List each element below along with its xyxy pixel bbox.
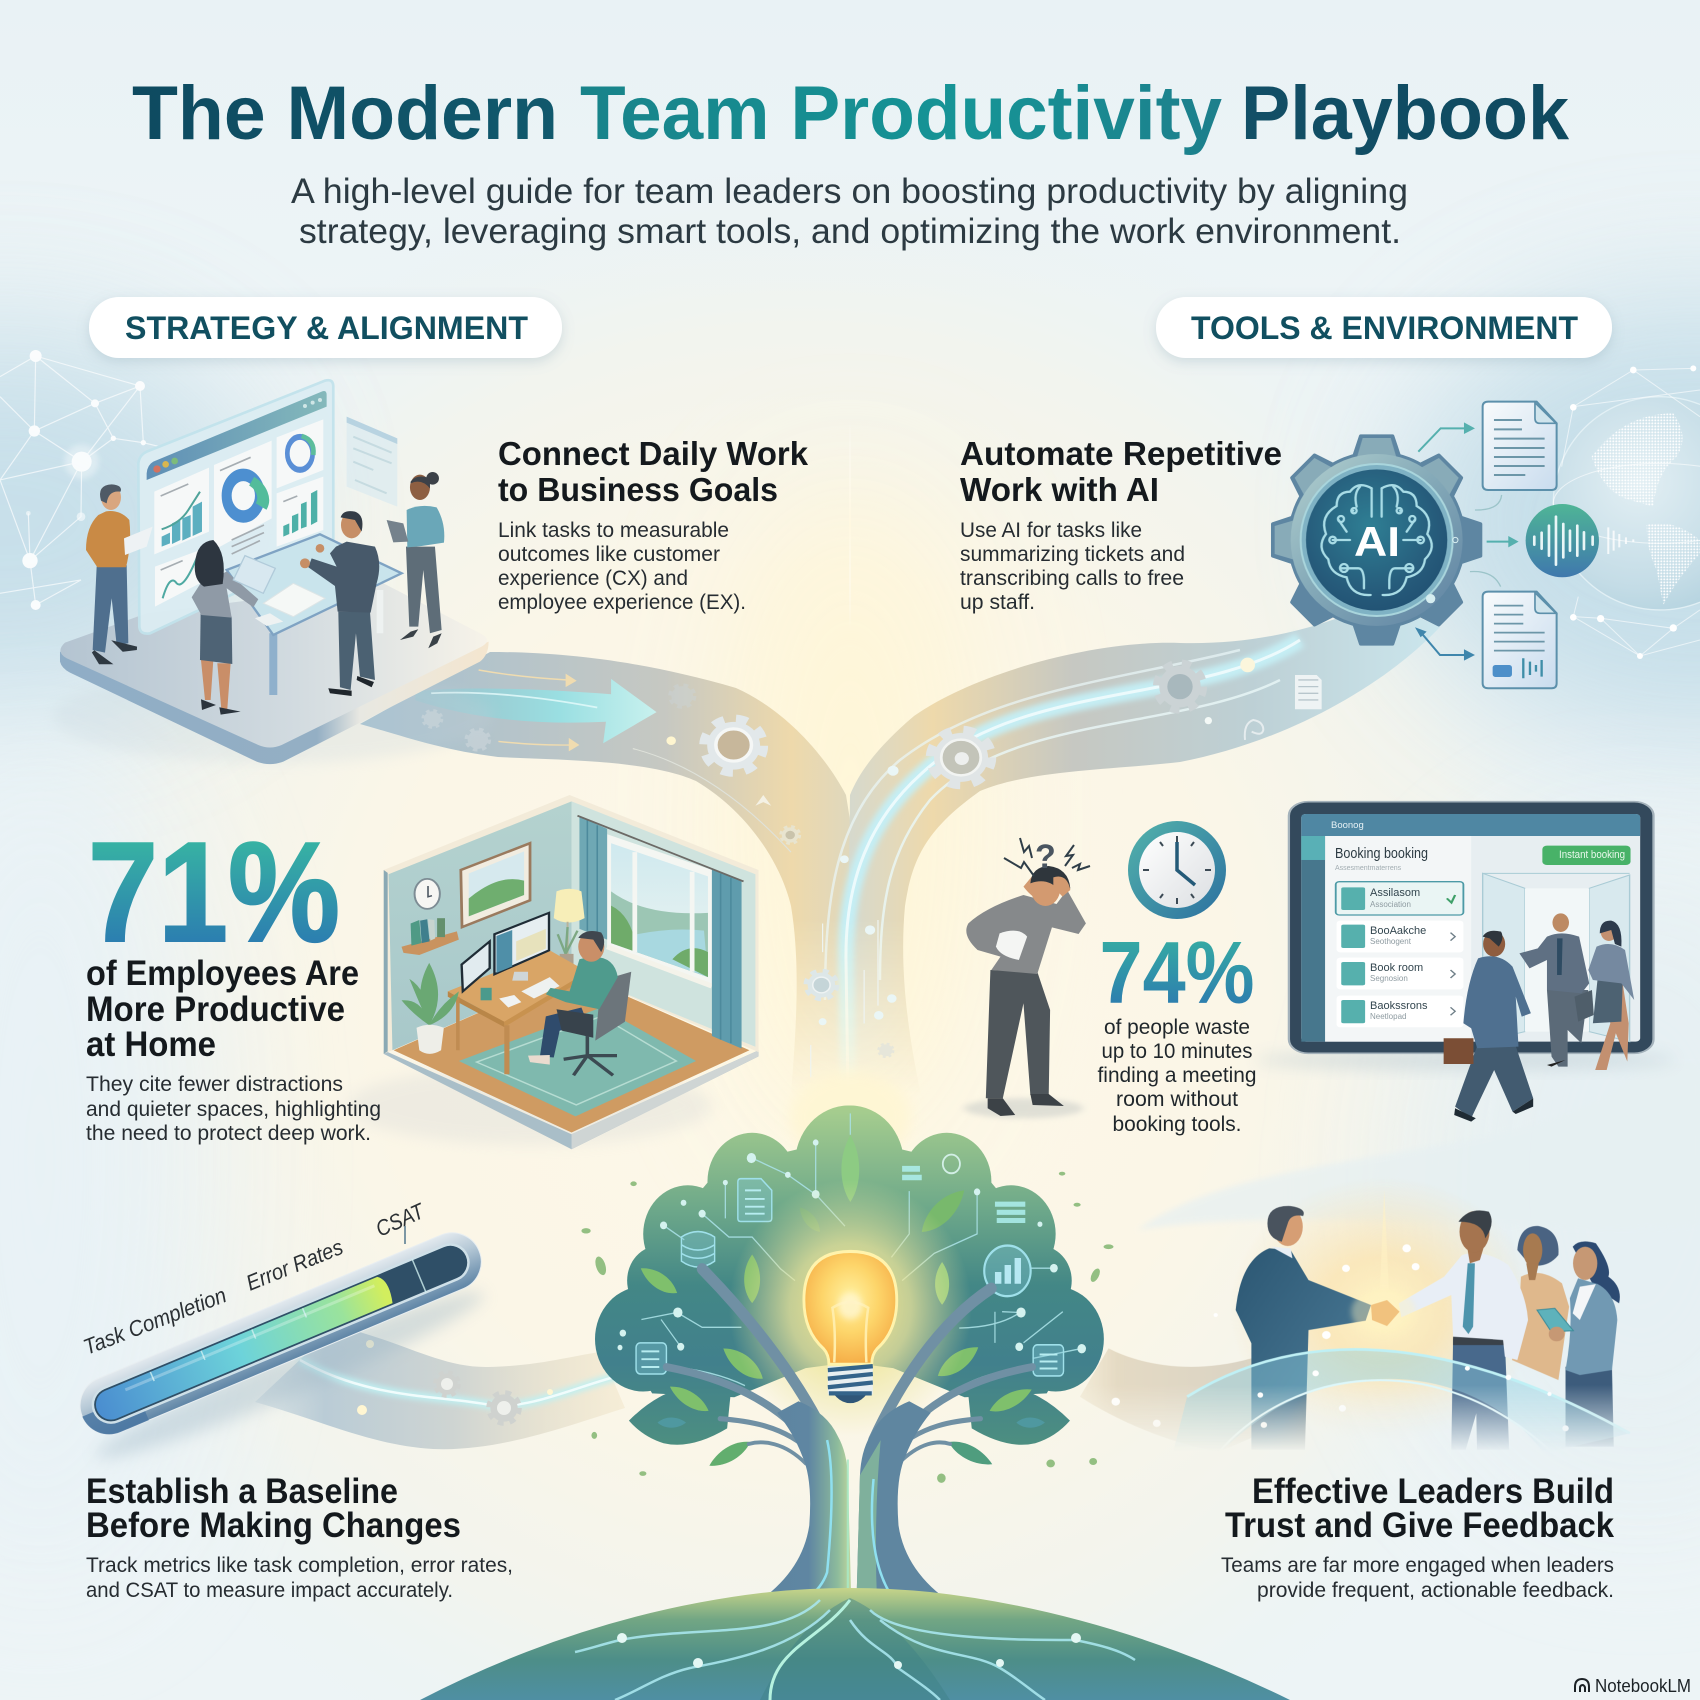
leaves in crown bbox=[637, 1135, 1045, 1472]
manager in white shirt bbox=[1399, 1210, 1528, 1450]
gears on left road bbox=[423, 685, 694, 750]
stat: 71 percent: They cite fewer distractions bbox=[86, 1072, 343, 1096]
man in dark suit bbox=[1236, 1206, 1371, 1450]
lightbulb bbox=[804, 1251, 897, 1403]
illustration: team at dashboard on platform bbox=[53, 380, 493, 764]
man walking with briefcase bbox=[1444, 931, 1533, 1122]
tablet booking app with people bbox=[1255, 802, 1675, 1122]
tablet text: Association bbox=[1370, 900, 1411, 909]
illustration: AI gear with outputs bbox=[1273, 402, 1633, 688]
tablet text: Segnosion bbox=[1370, 974, 1408, 983]
bulb glow bbox=[729, 1179, 972, 1436]
woman with teal tablet bbox=[1537, 1241, 1620, 1447]
stat: 71 percent: More Productive bbox=[86, 990, 345, 1029]
stress marks: ? bbox=[1035, 838, 1056, 876]
person: man in orange sweater bbox=[86, 484, 153, 663]
network mesh, left bbox=[0, 350, 160, 610]
potted plant bbox=[402, 963, 459, 1054]
falling leaves bbox=[581, 1172, 1114, 1483]
dashboard screen bbox=[138, 380, 333, 634]
arrows from gear bbox=[1415, 422, 1519, 661]
tablet text: Instant booking bbox=[1559, 849, 1625, 861]
text block: automate repetitive work: summarizing tickets and bbox=[960, 543, 1185, 566]
stat: 71 percent: at Home bbox=[86, 1025, 216, 1064]
text block: establish a baseline: Track metrics like task completion, error rates, bbox=[86, 1554, 513, 1577]
platform bbox=[60, 583, 489, 764]
tablet text: Seothogent bbox=[1370, 937, 1412, 946]
title: Team Productivity bbox=[580, 71, 1222, 156]
central tree with lightbulb bbox=[581, 1071, 1114, 1700]
tablet text: Booking booking bbox=[1335, 845, 1428, 862]
flowing roads converging into trunk bbox=[360, 600, 1440, 1095]
pill: tools and environment: TOOLS & ENVIRONMENT bbox=[1191, 310, 1578, 346]
illustration: leaders handshake bbox=[1080, 1177, 1630, 1453]
data icons bbox=[636, 1179, 1064, 1376]
text block: establish a baseline: Before Making Changes bbox=[86, 1506, 461, 1545]
text block: establish a baseline: Establish a Baseline bbox=[86, 1472, 398, 1511]
desk bbox=[448, 950, 587, 1074]
subtitle: strategy, leveraging smart tools, and optimizing the work environment. bbox=[299, 212, 1401, 251]
pill: strategy and alignment bbox=[89, 297, 562, 358]
stat: 71 percent: of Employees Are bbox=[86, 954, 359, 993]
person: woman with tablet bbox=[192, 540, 275, 715]
stat: 71 percent bbox=[86, 813, 381, 1145]
text block: connect daily work bbox=[498, 435, 809, 614]
pill: strategy and alignment: STRATEGY & ALIGNMENT bbox=[125, 310, 528, 346]
right road decorations bbox=[1157, 658, 1322, 740]
text block: automate repetitive work: transcribing calls to free bbox=[960, 567, 1184, 590]
circuit traces bbox=[620, 1113, 1081, 1386]
NotebookLM brand mark: NotebookLM bbox=[1595, 1676, 1691, 1696]
stat: 74 percent: booking tools. bbox=[1112, 1112, 1242, 1136]
pill: tools and environment bbox=[1156, 297, 1612, 358]
shelf with books bbox=[402, 918, 459, 955]
glow behind hands bbox=[1264, 1189, 1520, 1419]
stat: 74 percent: 74% bbox=[1100, 923, 1254, 1022]
colleagues in doorway bbox=[1444, 913, 1634, 1122]
text block: connect daily work: Link tasks to measurable bbox=[498, 519, 729, 542]
text block: connect daily work: to Business Goals bbox=[498, 471, 778, 508]
text block: establish a baseline bbox=[86, 1472, 513, 1602]
AI gear bbox=[1273, 436, 1481, 644]
gear on lower right road bbox=[931, 730, 991, 784]
glow above crown bbox=[790, 1071, 911, 1164]
tablet text: Assesmentmaterrens bbox=[1335, 865, 1402, 872]
text block: establish a baseline: and CSAT to measure impact accurately. bbox=[86, 1579, 453, 1602]
ground hill with roots bbox=[420, 1588, 1290, 1700]
title: Playbook bbox=[1241, 71, 1570, 156]
text block: effective leaders: Teams are far more engaged when leaders bbox=[1221, 1554, 1614, 1577]
left road decorations: arrow and gears bbox=[415, 670, 899, 1077]
tablet text: Neetlopad bbox=[1370, 1012, 1406, 1021]
floor lamp and desk plant bbox=[554, 889, 585, 967]
tablet text: Boonog bbox=[1331, 820, 1364, 831]
text block: automate repetitive work: up staff. bbox=[960, 591, 1035, 614]
text block: effective leaders: Effective Leaders Build bbox=[1252, 1472, 1614, 1511]
text block: automate repetitive work bbox=[960, 435, 1282, 614]
illustration: frustrated man bbox=[964, 866, 1086, 1118]
clock icon bbox=[1128, 821, 1226, 919]
text block: automate repetitive work: Use AI for tasks like bbox=[960, 519, 1142, 542]
stress marks bbox=[1004, 838, 1090, 876]
globe and network, right bbox=[1553, 365, 1700, 659]
subtitle: A high-level guide for team leaders on boosting productivity by aligning bbox=[291, 172, 1408, 211]
glowing bridge arcs bbox=[1111, 1244, 1630, 1453]
stat: 71 percent: the need to protect deep work. bbox=[86, 1121, 371, 1145]
room shell bbox=[384, 795, 759, 1149]
stat: 74 percent: finding a meeting bbox=[1098, 1063, 1256, 1087]
tablet text: Baokssrons bbox=[1370, 1000, 1428, 1012]
floating side panel bbox=[347, 417, 397, 507]
person: woman with clipboard bbox=[387, 472, 444, 648]
title bbox=[132, 71, 1570, 156]
stat: 74 percent: of people waste bbox=[1104, 1015, 1250, 1039]
text block: connect daily work: Connect Daily Work bbox=[498, 435, 809, 472]
stat: 74 percent bbox=[1098, 923, 1256, 1136]
text block: effective leaders: provide frequent, actionable feedback. bbox=[1257, 1579, 1614, 1602]
lower right road bbox=[1080, 1348, 1252, 1439]
tablet text bbox=[1331, 820, 1625, 1021]
clasped hands bbox=[1371, 1300, 1400, 1326]
crown bbox=[595, 1106, 1104, 1445]
big arrow bbox=[415, 679, 657, 743]
stat: 71 percent: and quieter spaces, highlighting bbox=[86, 1097, 381, 1121]
framed landscape bbox=[461, 843, 530, 927]
bar label: Task Completion: Task Completion bbox=[80, 1282, 230, 1360]
illustration: home office room bbox=[348, 795, 759, 1149]
table bbox=[227, 534, 402, 695]
person at desk bbox=[528, 931, 631, 1075]
person: man in suit bbox=[300, 511, 379, 696]
text block: effective leaders: Trust and Give Feedback bbox=[1225, 1506, 1614, 1545]
tablet text: BooAakche bbox=[1370, 925, 1426, 937]
text block: automate repetitive work: Automate Repetitive bbox=[960, 435, 1282, 472]
document top bbox=[1483, 402, 1557, 490]
woman in beige bbox=[1512, 1226, 1569, 1380]
AI label on gear: AI bbox=[1354, 518, 1400, 565]
stat: 71 percent: 71% bbox=[88, 813, 340, 972]
text block: effective leaders bbox=[1221, 1472, 1614, 1602]
window with curtains bbox=[577, 816, 744, 1049]
bar label: CSAT: CSAT bbox=[372, 1198, 429, 1242]
title: The Modern bbox=[132, 71, 558, 156]
monitors bbox=[462, 913, 549, 991]
subtitle bbox=[291, 172, 1408, 251]
text block: connect daily work: employee experience (EX). bbox=[498, 591, 746, 614]
text block: connect daily work: outcomes like customer bbox=[498, 543, 720, 566]
audio waveform circle bbox=[1526, 504, 1633, 577]
document bottom with audio bbox=[1483, 592, 1557, 688]
wall clock bbox=[415, 879, 440, 909]
lower left road bbox=[255, 1326, 625, 1449]
bar label: Error Rates: Error Rates bbox=[243, 1234, 346, 1296]
stat: 74 percent: up to 10 minutes bbox=[1102, 1039, 1252, 1063]
tablet text: Assilasom bbox=[1370, 887, 1420, 899]
metric progress bar bbox=[71, 1198, 491, 1474]
text block: automate repetitive work: Work with AI bbox=[960, 471, 1159, 508]
stat: 74 percent: room without bbox=[1116, 1087, 1238, 1111]
text block: connect daily work: experience (CX) and bbox=[498, 567, 688, 590]
tablet text: Book room bbox=[1370, 962, 1423, 974]
branches and trunk bbox=[666, 1269, 1032, 1463]
